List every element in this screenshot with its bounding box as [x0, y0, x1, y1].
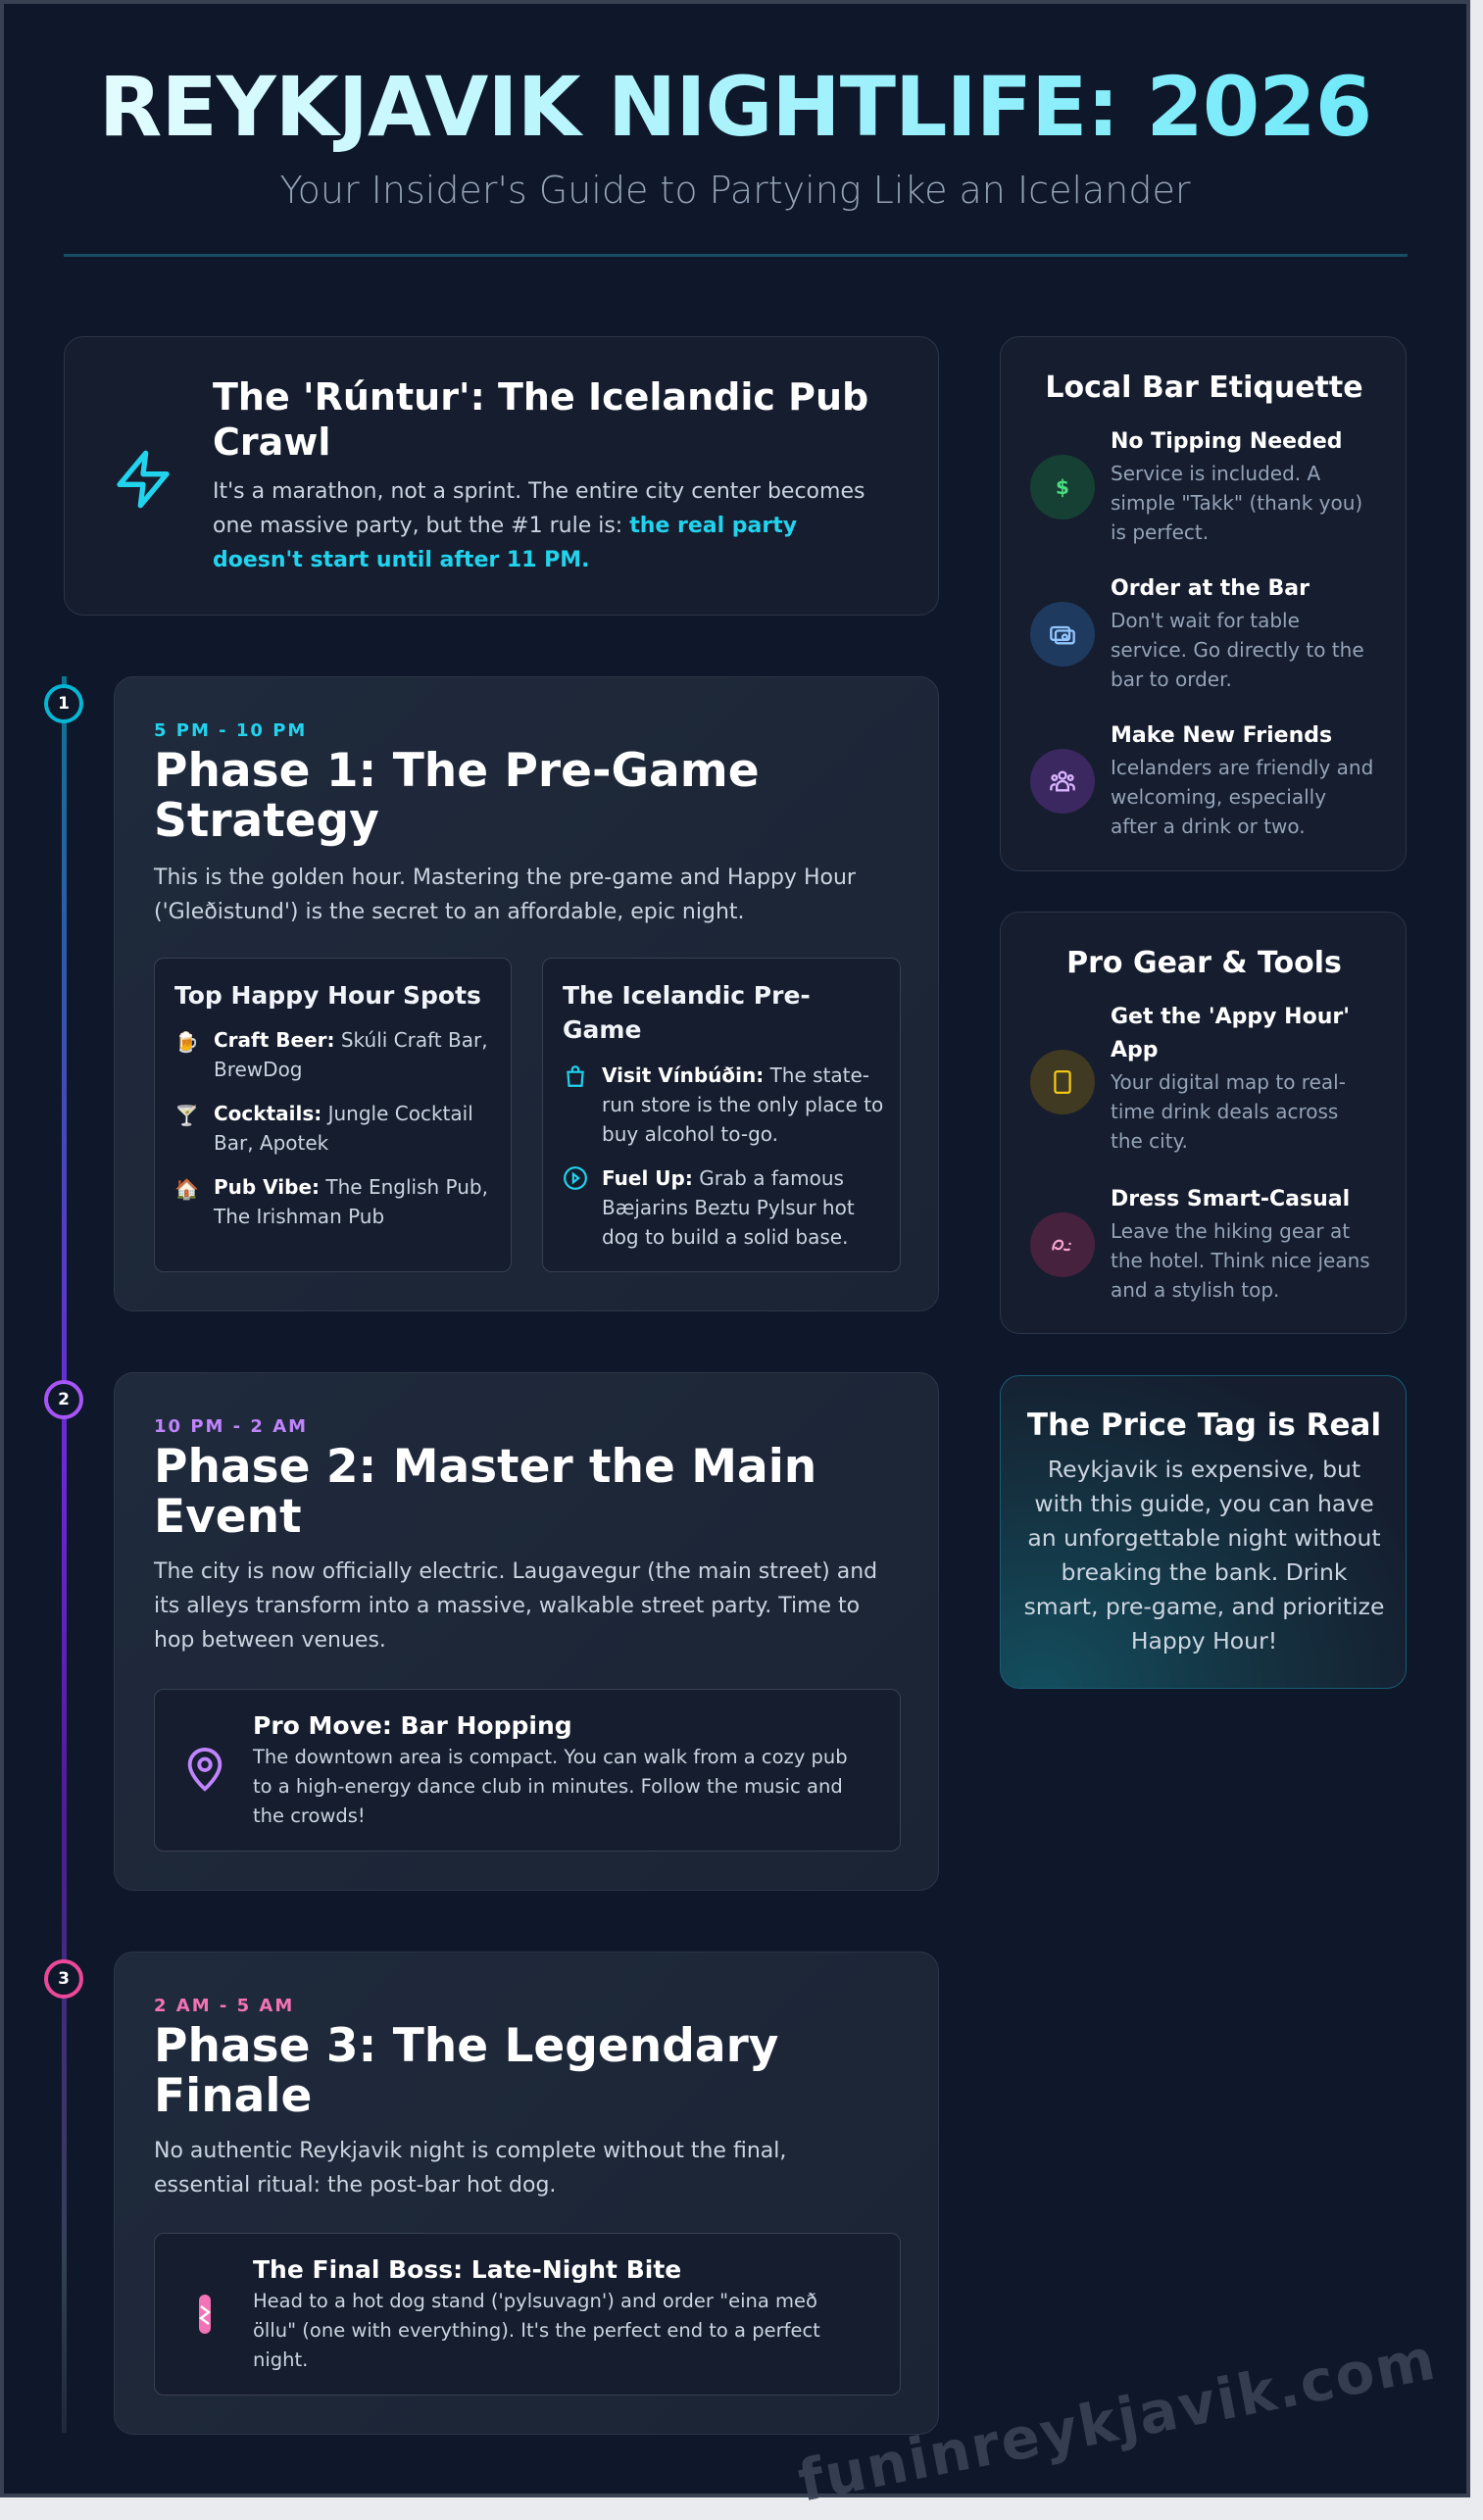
runtur heading: The 'Rúntur': The Icelandic Pub Crawl	[213, 375, 868, 464]
item: make friends: after a drink or two.	[1111, 815, 1306, 838]
time label 2: 10 PM - 2 AM	[154, 1416, 308, 1437]
item: dress: the hotel. Think nice jeans	[1111, 1249, 1370, 1272]
item: order at bar: Order at the Bar	[1111, 576, 1310, 601]
subcard: happy hour spots: 🏠	[174, 1177, 199, 1201]
item: app	[1030, 1005, 1350, 1153]
phase 2 heading: Phase 2: Master the Main Event	[154, 1440, 816, 1544]
timeline marker 3: 3	[58, 1969, 70, 1989]
item: no tipping: No Tipping Needed	[1111, 429, 1343, 454]
icon: map pin	[188, 1748, 222, 1792]
gear heading: Pro Gear & Tools	[1066, 946, 1342, 980]
item: make friends: Icelanders are friendly and	[1111, 756, 1373, 779]
timeline line	[62, 676, 67, 2433]
item: order at bar: service. Go directly to the	[1111, 638, 1364, 662]
callout: late-night bite	[154, 2233, 901, 2396]
timeline marker 1: 1	[58, 694, 70, 714]
watermark: funinreykjavik.com	[793, 2326, 1442, 2514]
panel: pro gear	[1000, 912, 1407, 1334]
subcard: icelandic pre-game: Fuel Up: Grab a famous Bæjarins Beztu Pylsur hot dog to build a solid base.	[602, 1166, 855, 1249]
etiquette heading: Local Bar Etiquette	[1045, 371, 1363, 405]
subcard: happy hour spots: Cocktails: Jungle Cocktail Bar, Apotek	[214, 1102, 473, 1155]
panel: price tag	[1000, 1375, 1407, 1689]
subcard: icelandic pre-game	[542, 958, 901, 1272]
callout: bar hopping	[154, 1689, 901, 1852]
runtur text: It's a marathon, not a sprint. The entire city center becomes one massive party, but the #1 rule is: the real party doesn't start until after 11 PM.	[213, 479, 865, 572]
phase 3 text: No authentic Reykjavik night is complete without the final, essential ritual: the post-bar hot dog.	[154, 2139, 786, 2198]
item: no tipping	[1030, 429, 1362, 544]
item: app: time drink deals across	[1111, 1100, 1338, 1123]
item: no tipping: Service is included. A	[1111, 462, 1320, 485]
timeline marker 2	[44, 1380, 83, 1419]
phase 3 heading: Phase 3: The Legendary Finale	[154, 2019, 778, 2123]
subcard: icelandic pre-game: The Icelandic Pre-Game	[563, 981, 811, 1044]
icon: lightning	[117, 451, 170, 508]
item: dress: Dress Smart-Casual	[1111, 1187, 1350, 1211]
subcard: happy hour spots: Craft Beer: Skúli Craft Bar, BrewDog	[214, 1028, 488, 1081]
panel: runtur intro	[64, 336, 939, 616]
subcard: happy hour spots: Top Happy Hour Spots	[174, 981, 481, 1010]
item: order at bar: bar to order.	[1111, 667, 1232, 691]
subcard: happy hour spots: 🍸	[174, 1104, 199, 1127]
item: dress: and a stylish top.	[1111, 1278, 1279, 1302]
callout: late-night bite: The Final Boss: Late-Night Bite	[253, 2255, 681, 2284]
phase 1 heading: Phase 1: The Pre-Game Strategy	[154, 744, 760, 848]
timeline marker 3	[44, 1959, 83, 1999]
item: order at bar: Don't wait for table	[1111, 609, 1300, 632]
item: app: the city.	[1111, 1129, 1188, 1153]
item: no tipping: simple "Takk" (thank you)	[1111, 491, 1362, 515]
item: no tipping: $	[1056, 475, 1069, 499]
callout: late-night bite: Head to a hot dog stand ('pylsuvagn') and order "eina með öllu" (one with everything). It's the perfect end to a perfect night.	[253, 2290, 820, 2371]
item: app: App	[1111, 1038, 1159, 1062]
subcard: happy hour spots	[154, 958, 512, 1272]
callout: bar hopping: The downtown area is compact. You can walk from a cozy pub to a high-energy dance club in minutes. Follow the music and the crowds!	[253, 1746, 848, 1827]
item: app: Get the 'Appy Hour'	[1111, 1005, 1350, 1029]
subcard: icelandic pre-game: Visit Vínbúðin: The state-run store is the only place to buy alcohol to-go.	[602, 1063, 883, 1146]
time label 1: 5 PM - 10 PM	[154, 720, 307, 741]
item: make friends	[1030, 723, 1373, 838]
subcard: happy hour spots: Pub Vibe: The English Pub, The Irishman Pub	[214, 1175, 488, 1228]
item: no tipping: is perfect.	[1111, 520, 1209, 544]
item: dress: Leave the hiking gear at	[1111, 1219, 1350, 1243]
timeline marker 2: 2	[58, 1390, 70, 1409]
panel: local bar etiquette	[1000, 336, 1407, 871]
subcard: happy hour spots: 🍺	[174, 1030, 199, 1054]
panel: phase 1	[114, 676, 939, 1311]
item: order at bar	[1030, 576, 1364, 691]
item: make friends: Make New Friends	[1111, 723, 1332, 748]
panel: phase 2	[114, 1372, 939, 1891]
item: make friends: welcoming, especially	[1111, 785, 1326, 809]
callout: bar hopping: Pro Move: Bar Hopping	[253, 1711, 572, 1740]
item: app: Your digital map to real-	[1111, 1070, 1346, 1094]
price heading: The Price Tag is Real	[1027, 1408, 1381, 1443]
icon: hot dog	[199, 2295, 211, 2334]
timeline marker 1	[44, 684, 83, 723]
phase 1 text: This is the golden hour. Mastering the pre-game and Happy Hour ('Gleðistund') is the secret to an affordable, epic night.	[154, 865, 856, 924]
time label 3: 2 AM - 5 AM	[154, 1996, 294, 2016]
panel: phase 3	[114, 1952, 939, 2435]
subtitle: Your Insider's Guide to Partying Like an Icelander	[279, 169, 1191, 212]
item: dress	[1030, 1187, 1370, 1302]
phase 2 text: The city is now officially electric. Laugavegur (the main street) and its alleys transform into a massive, walkable street party. Time to hop between venues.	[154, 1559, 877, 1653]
price text: Reykjavik is expensive, but with this guide, you can have an unforgettable night without breaking the bank. Drink smart, pre-game, and prioritize Happy Hour!	[1024, 1456, 1384, 1655]
title: REYKJAVIK NIGHTLIFE: 2026	[99, 59, 1371, 155]
